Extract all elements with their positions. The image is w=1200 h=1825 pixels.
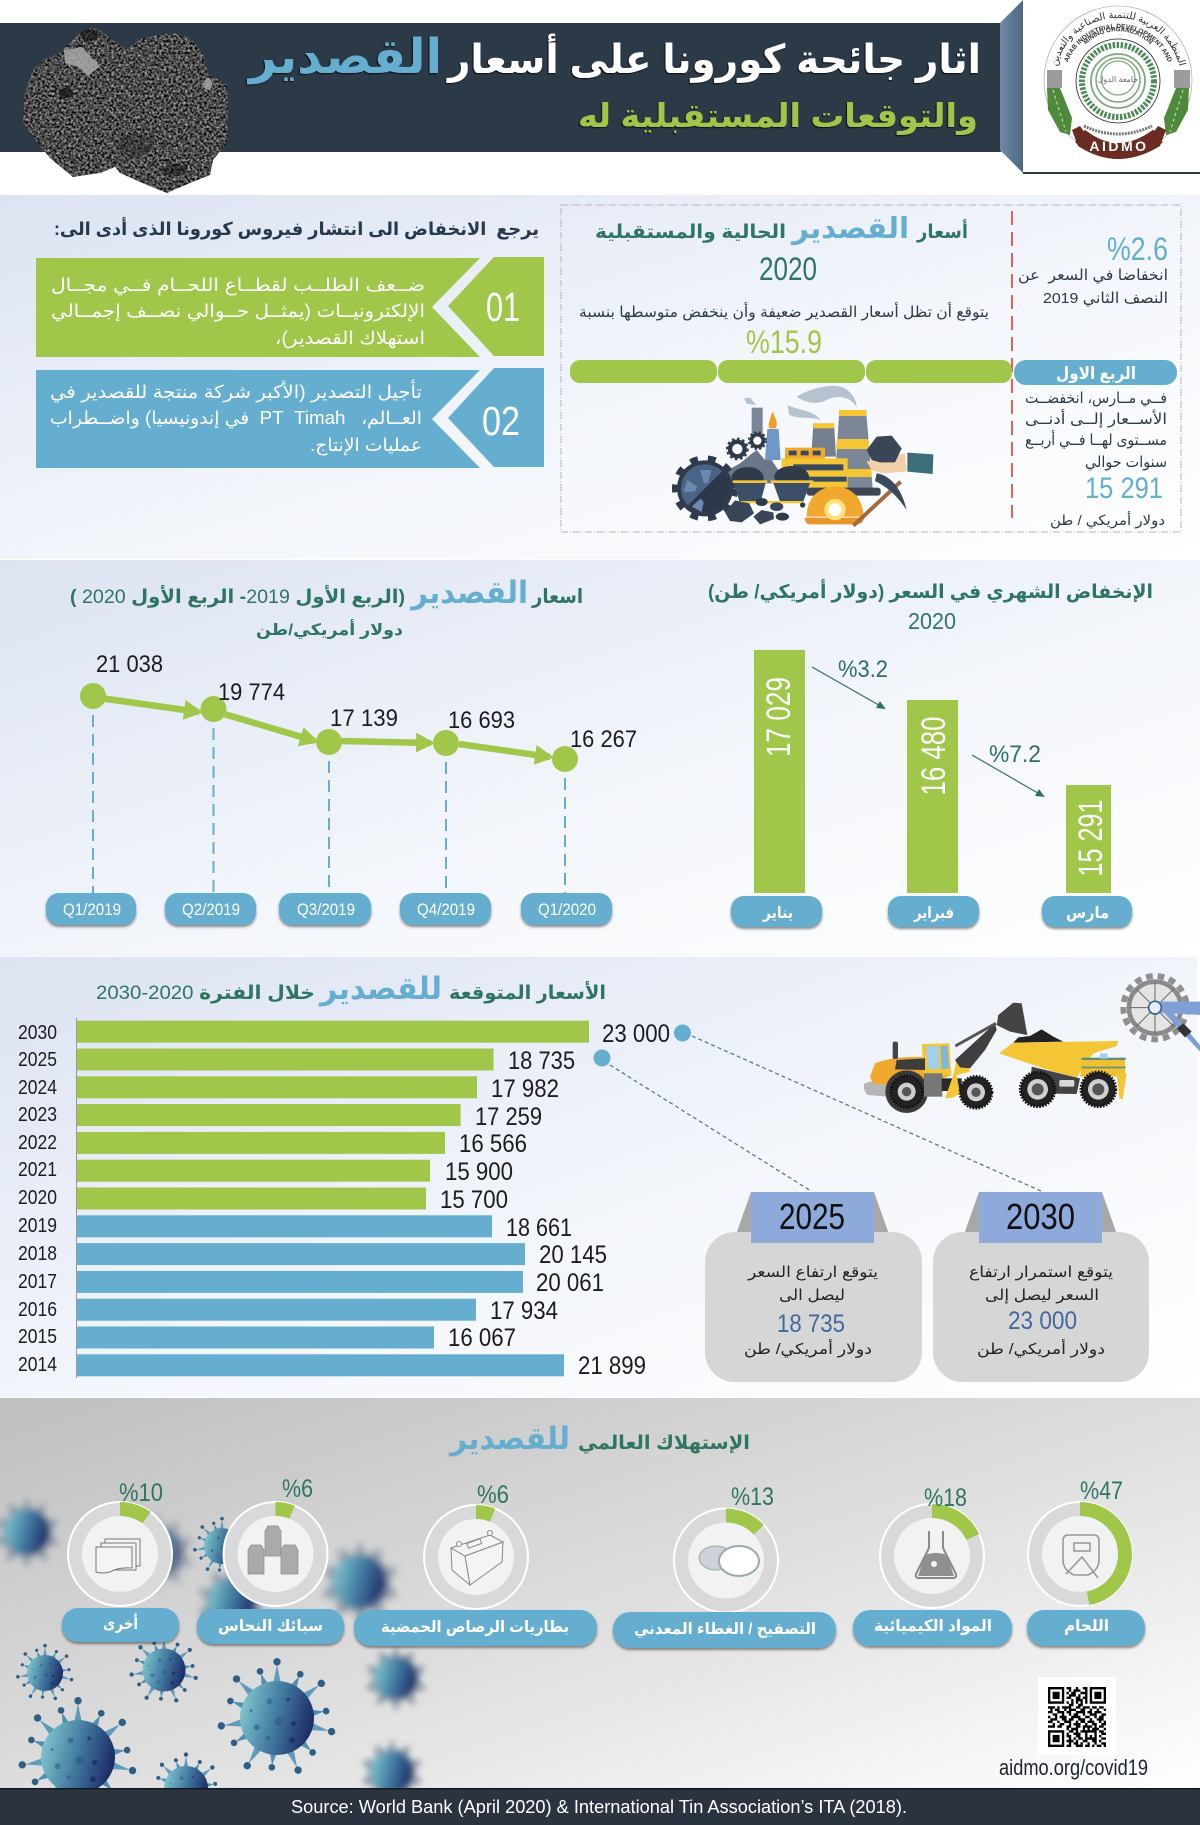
icon: battery — [451, 1530, 503, 1585]
line chart heading: القصدير — [409, 575, 528, 611]
pill: solder — [1027, 1610, 1145, 1646]
quarter pills — [46, 893, 612, 925]
pill: chemicals: المواد الكيميائية — [874, 1618, 992, 1635]
QR code — [1038, 1677, 1116, 1755]
card: 2030 forecast: 2030 — [1006, 1196, 1075, 1237]
pill: tinplating — [613, 1612, 836, 1648]
card: 2025 forecast: يتوقع ارتفاع السعر — [747, 1264, 878, 1281]
reason 01 text: ضــعف الطلــب لقطــاع اللحــام فــي مجــال — [51, 275, 425, 296]
gauge: solder 47 percent — [1028, 1477, 1132, 1606]
stat: march text: مســتوى لهــا فــي أربــع — [1025, 430, 1167, 450]
consumption heading: الإستهلاك العالمي — [578, 1433, 750, 1454]
logo wheat and columns — [1047, 70, 1190, 135]
connector lines with dots — [594, 1024, 1041, 1191]
decline labels: %3.2 — [838, 656, 888, 683]
logo gear band: AIDMO — [1089, 138, 1149, 154]
year labels: 2018 — [18, 1243, 57, 1265]
bar labels: 17 029 — [760, 677, 798, 757]
stat: march text — [1025, 390, 1167, 529]
month pills — [731, 896, 1132, 927]
tin ore rock — [23, 28, 228, 193]
value labels: 15 700 — [440, 1186, 508, 1214]
section 1 background — [0, 195, 1200, 559]
gauge: tinplating 13 percent: %13 — [731, 1483, 774, 1511]
left heading: causes: يرجع الانخفاض الى انتشار فيروس كورونا الذى أدى الى: — [54, 217, 539, 240]
gauge: solder 47 percent: %47 — [1080, 1477, 1123, 1505]
pill: first quarter — [1014, 360, 1177, 385]
value labels: 17 982 — [491, 1075, 559, 1103]
icon: welding mask — [1063, 1535, 1099, 1578]
data labels: 19 774 — [218, 679, 285, 706]
panel: reason 01 — [36, 257, 544, 357]
decline labels: %7.2 — [989, 741, 1041, 768]
card: 2025 forecast — [705, 1192, 922, 1382]
stat: 2.6 percent: انخفاضا في السعر عن — [1018, 267, 1168, 285]
icon: loader and dump truck — [864, 1003, 1127, 1113]
number 02: 02 — [482, 398, 520, 444]
pill: tinplating: التصفيح / الغطاء المعدني — [634, 1621, 816, 1639]
forecast bars — [77, 1021, 589, 1210]
pill: solder: اللحام — [1064, 1618, 1109, 1635]
forecast percent: %15.9 — [746, 324, 822, 360]
AIDMO logo — [1044, 6, 1192, 159]
year labels — [18, 1022, 57, 1376]
title — [247, 31, 981, 85]
data labels — [96, 651, 637, 753]
banner 3D side — [1000, 0, 1023, 173]
value labels: 17 259 — [475, 1103, 542, 1131]
line chart unit: دولار أمريكي/طن — [256, 619, 403, 640]
reason 02 text: تأجيل التصدير (الأكبر شركة منتجة للقصدير في — [50, 379, 422, 403]
gauge: copper alloys 6 percent: %6 — [282, 1475, 313, 1503]
logo english ring text 2: MINING ORGANIZATION — [1083, 26, 1153, 44]
panel: reason 02 — [36, 368, 544, 468]
expected prices heading — [96, 971, 606, 1007]
section 3 background — [0, 957, 1197, 1397]
data labels: 17 139 — [330, 705, 398, 732]
stat: march text: فــي مــارس، انخفضــت — [1025, 390, 1167, 408]
card: 2030 forecast: دولار أمريكي/ طن — [977, 1339, 1105, 1359]
month pills: مارس — [1066, 905, 1109, 922]
logo emblem: جامعة الدول — [1098, 75, 1138, 84]
card: 2030 forecast — [933, 1192, 1149, 1382]
pill: other — [62, 1608, 179, 1642]
data labels: 16 693 — [448, 707, 515, 734]
source text: Source: World Bank (April 2020) & International Tin Association’s ITA (2018). — [291, 1797, 907, 1817]
pill: copper alloys — [197, 1609, 344, 1644]
value labels: 18 661 — [506, 1214, 572, 1242]
section 4 background — [0, 1398, 1200, 1788]
gauge: lead acid batteries 6 percent: %6 — [477, 1481, 509, 1509]
line chart heading: اسعار — [531, 586, 583, 608]
gauge: chemicals 18 percent — [880, 1484, 984, 1608]
year labels: 2021 — [18, 1159, 57, 1181]
card: 2030 forecast: 23 000 — [1008, 1307, 1077, 1335]
pill: lead acid batteries — [354, 1610, 597, 1646]
line chart panel: tin prices — [46, 575, 637, 925]
title: القصدير — [247, 31, 442, 85]
logo emblem — [1076, 39, 1160, 123]
monthly year: 2020 — [908, 608, 956, 634]
pill: chemicals — [853, 1610, 1012, 1646]
expected prices heading: للقصدير — [318, 971, 442, 1007]
decline arrows — [812, 667, 1043, 796]
stat: march text: الأســعار إلــى أدنــى — [1025, 409, 1167, 428]
expected prices heading: خلال الفترة 2020-2030 — [96, 983, 315, 1004]
price panel heading: القصدير — [790, 213, 909, 245]
logo arabic ring text: المنظمة العربية للتنمية الصناعية والتعدين — [1054, 12, 1186, 66]
bar labels: 16 480 — [915, 716, 953, 796]
year 2020: 2020 — [759, 251, 817, 287]
gauge: other 10 percent: %10 — [119, 1479, 163, 1507]
gauge: chemicals 18 percent: %18 — [924, 1484, 967, 1512]
logo gear band — [1072, 126, 1166, 159]
number 01: 01 — [486, 284, 520, 330]
year labels: 2017 — [18, 1271, 57, 1293]
forecast sentence: يتوقع أن تظل أسعار القصدير ضعيفة وأن ينخفض متوسطها بنسبة — [579, 302, 989, 321]
year labels: 2019 — [18, 1215, 57, 1237]
card: 2025 forecast: دولار أمريكي/ طن — [744, 1339, 872, 1359]
quarter pills: Q1/2020 — [538, 900, 596, 919]
reason 01 text: استهلاك القصدير)، — [275, 328, 425, 349]
year labels: 2030 — [18, 1022, 57, 1044]
stat: march text: سنوات حوالي — [1085, 454, 1167, 472]
footer source bar — [0, 1788, 1200, 1825]
bars — [754, 650, 1111, 893]
price panel heading: الحالية والمستقبلية — [595, 222, 786, 243]
reason 01 text: الإلكترونيــات (يمثــل حــوالي نصــف إجمــالي — [51, 301, 425, 322]
value labels: 16 067 — [448, 1324, 516, 1352]
title: اثار جائحة كورونا على أسعار — [446, 33, 981, 83]
decline labels — [838, 656, 1041, 768]
virus decorations — [0, 1496, 426, 1822]
gauge: other 10 percent — [68, 1479, 172, 1606]
icon: metal discs — [699, 1546, 759, 1576]
value labels: 23 000 — [602, 1020, 670, 1048]
price panel heading: أسعار — [916, 219, 968, 243]
price panel heading — [595, 213, 968, 245]
section 2 background — [0, 560, 1200, 957]
value labels: 17 934 — [490, 1297, 558, 1325]
value labels — [440, 1020, 670, 1380]
card: 2025 forecast: 2025 — [779, 1196, 845, 1237]
pill: other: أخرى — [103, 1613, 138, 1633]
panel: current and future prices — [561, 205, 1181, 532]
bar labels: 15 291 — [1072, 800, 1110, 876]
consumption heading — [448, 1421, 750, 1457]
expected prices heading: الأسعار المتوقعة — [449, 981, 606, 1004]
data points — [80, 683, 578, 772]
year labels: 2025 — [18, 1049, 57, 1071]
website link text: aidmo.org/covid19 — [999, 1755, 1148, 1780]
logo english ring text: ARAB INDUSTRIAL DEVELOPMENT AND — [1064, 24, 1172, 62]
line chart heading — [70, 575, 583, 611]
year labels: 2022 — [18, 1132, 57, 1154]
value labels: 20 145 — [539, 1241, 607, 1269]
reason 02 text: عمليات الإنتاج. — [310, 435, 422, 456]
value labels: 16 566 — [459, 1130, 527, 1158]
year labels: 2016 — [18, 1299, 57, 1321]
card: 2025 forecast: ليصل الى — [779, 1287, 845, 1304]
value labels: 18 735 — [508, 1047, 575, 1075]
stat: 2.6 percent: %2.6 — [1107, 231, 1168, 267]
logo panel bottom line — [1023, 172, 1200, 174]
consumption heading: للقصدير — [448, 1421, 570, 1457]
quarter pills: Q2/2019 — [182, 900, 240, 919]
quarter pills: Q4/2019 — [417, 900, 475, 919]
banner band — [0, 23, 1001, 152]
horizontal bar chart: expected prices — [18, 971, 670, 1380]
stat: 2.6 percent: النصف الثاني 2019 — [1043, 290, 1168, 308]
dashed drop lines — [93, 696, 565, 893]
value labels: 15 900 — [445, 1158, 513, 1186]
line chart heading: (الربع الأول 2019- الربع الأول 2020 ) — [70, 585, 405, 608]
value labels: 20 061 — [536, 1269, 604, 1297]
subtitle: والتوقعات المستقبلية له — [578, 97, 978, 136]
value labels: 21 899 — [578, 1352, 646, 1380]
gauge: copper alloys 6 percent — [224, 1475, 328, 1606]
quarter pills: Q1/2019 — [63, 900, 121, 919]
header banner — [0, 0, 1200, 174]
icon: ingots — [248, 1526, 298, 1574]
gauge: lead acid batteries 6 percent — [424, 1481, 528, 1609]
icon: flask — [916, 1531, 956, 1578]
year labels: 2014 — [18, 1354, 57, 1376]
monthly heading: الإنخفاض الشهري في السعر (دولار أمريكي/ طن) — [708, 579, 1153, 604]
card: 2030 forecast: السعر ليصل إلى — [985, 1287, 1099, 1304]
year labels: 2023 — [18, 1104, 57, 1126]
icon: papers — [96, 1539, 140, 1573]
month pills: فبراير — [913, 905, 954, 922]
card: 2030 forecast: يتوقع استمرار ارتفاع — [969, 1264, 1113, 1281]
icon: mining illustration — [675, 386, 933, 526]
stat: march text: 15 291 — [1085, 472, 1163, 505]
quarter pills: Q3/2019 — [297, 900, 355, 919]
bar chart panel: monthly decline — [708, 579, 1153, 927]
reason 02 text: العــالم، PT Timah في إندونيسيا) واضــطراب — [50, 408, 422, 429]
year labels: 2015 — [18, 1326, 57, 1348]
month pills: يناير — [762, 905, 793, 922]
gauge: tinplating 13 percent — [674, 1483, 778, 1612]
year labels: 2020 — [18, 1187, 57, 1209]
data labels: 21 038 — [96, 651, 163, 678]
reason 02 text — [50, 379, 422, 456]
stat: march text: دولار أمريكي / طن — [1050, 511, 1165, 529]
trend arrows — [100, 698, 550, 757]
card: 2025 forecast: 18 735 — [777, 1310, 845, 1338]
green segmented bar — [570, 360, 1012, 383]
pill: copper alloys: سبائك النحاس — [218, 1618, 323, 1635]
pill: first quarter: الربع الاول — [1056, 364, 1136, 384]
reason 01 text — [51, 275, 425, 349]
year labels: 2024 — [18, 1077, 57, 1099]
history bars — [77, 1215, 564, 1376]
icon: bucket wheel — [1123, 976, 1200, 1052]
data labels: 16 267 — [570, 726, 637, 753]
stat: 2.6 percent — [1018, 231, 1168, 308]
bar labels — [760, 677, 1110, 876]
pill: lead acid batteries: بطاريات الرصاص الحمضية — [381, 1619, 569, 1636]
